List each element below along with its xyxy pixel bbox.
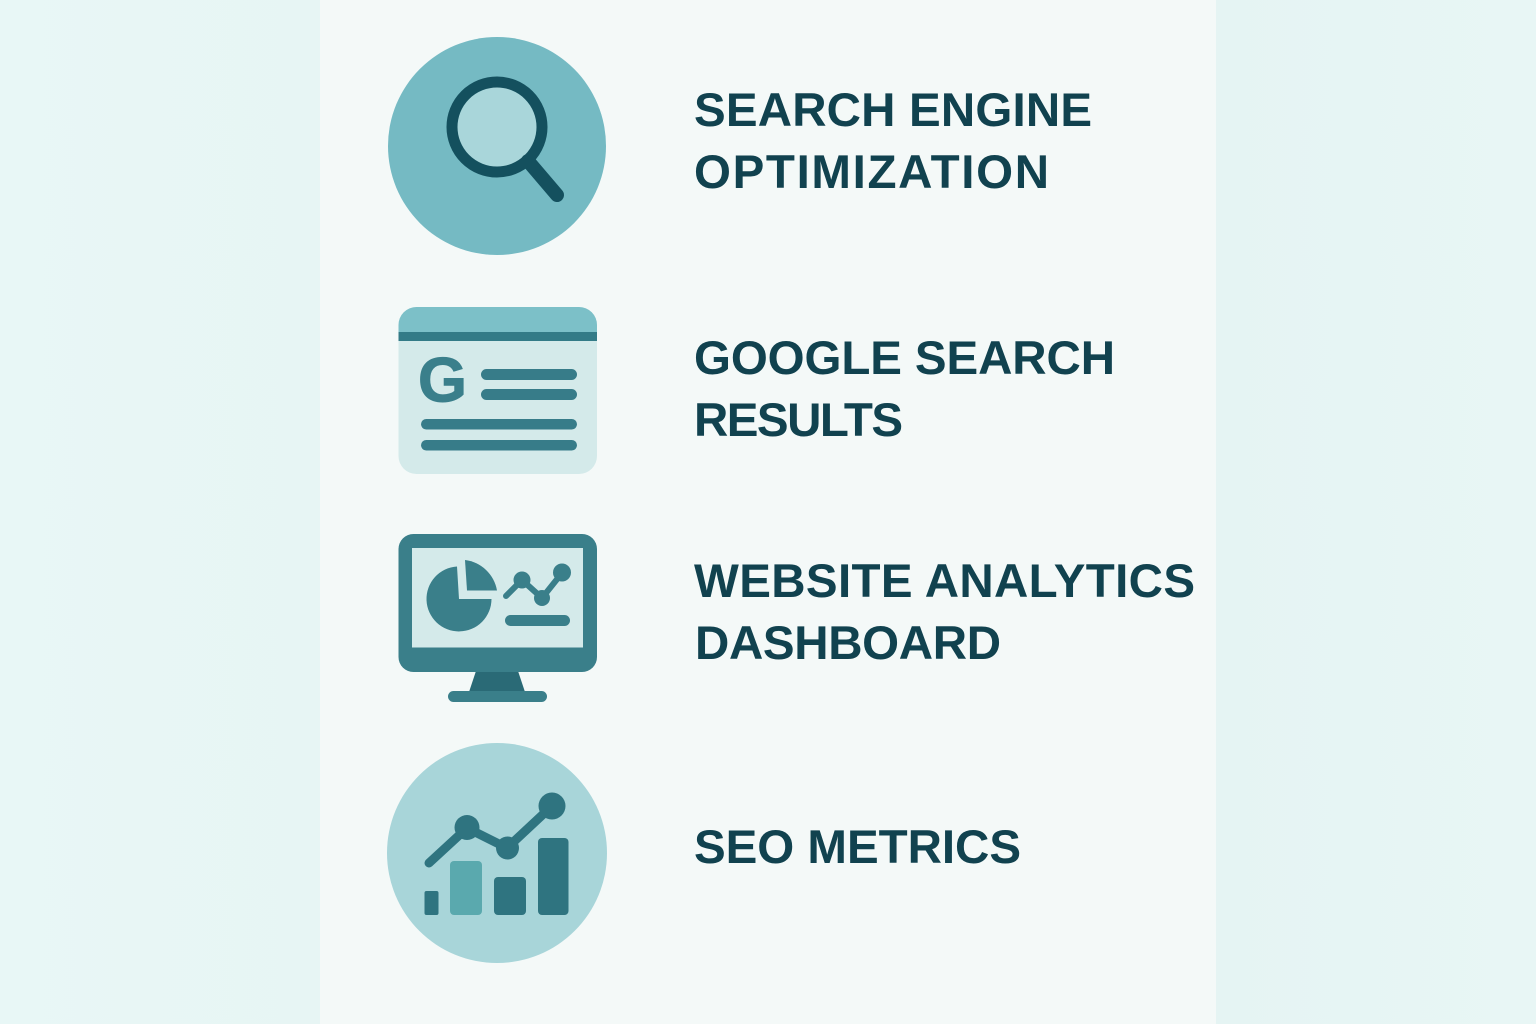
heading: website analytics dashboard: WEBSITE ANALYTICS xyxy=(694,555,1195,608)
icon: google search results window xyxy=(398,307,597,474)
heading: search engine optimization: SEARCH ENGINE xyxy=(694,84,1092,137)
heading: google search results: RESULTS xyxy=(694,394,903,447)
heading: website analytics dashboard xyxy=(694,555,1195,670)
heading: website analytics dashboard: DASHBOARD xyxy=(695,617,1001,670)
heading: google search results xyxy=(694,332,1115,447)
icon: SEO metrics chart in circle xyxy=(387,743,607,963)
icon: analytics dashboard monitor xyxy=(398,534,597,702)
icon: magnifying glass in circle xyxy=(388,37,606,255)
heading: search engine optimization: OPTIMIZATION xyxy=(694,146,1049,199)
heading: seo metrics: SEO METRICS xyxy=(694,821,1021,874)
icon: google search results window: G xyxy=(418,346,467,416)
center panel xyxy=(320,0,1216,1024)
heading: google search results: GOOGLE SEARCH xyxy=(694,332,1115,385)
heading: search engine optimization xyxy=(694,84,1092,199)
